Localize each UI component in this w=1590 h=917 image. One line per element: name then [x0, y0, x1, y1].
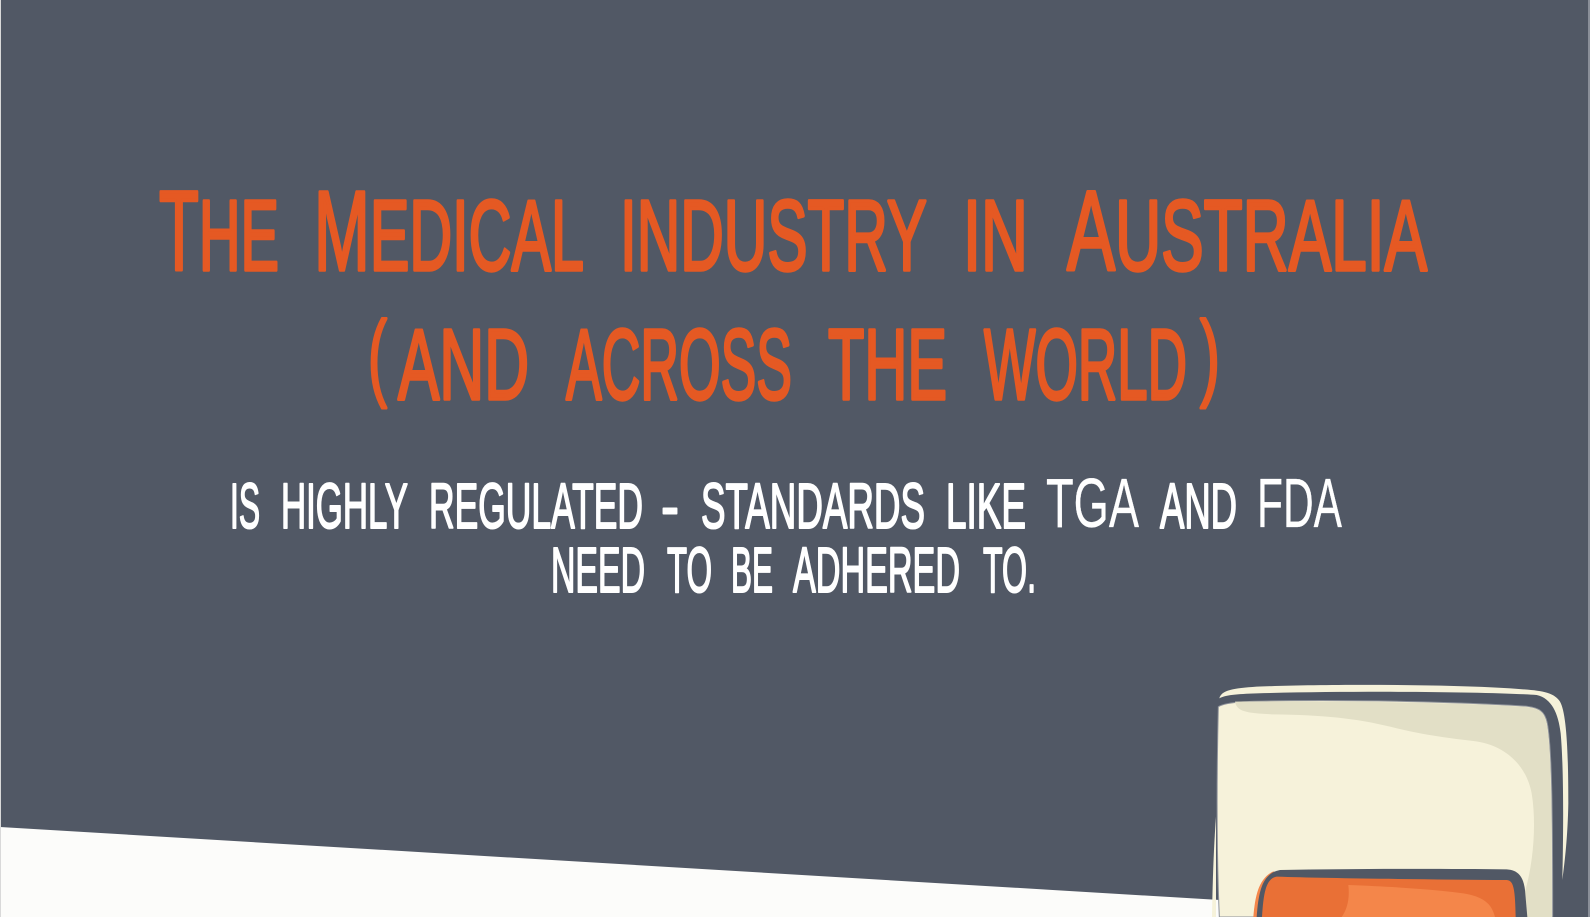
subtitle: NEED — [551, 534, 645, 606]
title: MEDICAL — [314, 168, 584, 294]
title: ) — [1200, 302, 1220, 409]
subtitle: LIKE — [946, 470, 1026, 542]
subtitle: TO — [667, 534, 712, 606]
subtitle: REGULATED — [429, 470, 643, 542]
subtitle: TGA — [1046, 464, 1139, 542]
subtitle: BE — [731, 534, 773, 606]
subtitle: - — [661, 470, 679, 542]
title: THE — [159, 168, 279, 294]
subtitle: STANDARDS — [701, 470, 925, 542]
subtitle: ADHERED — [793, 534, 960, 606]
title: IN — [963, 180, 1028, 292]
title: ( — [368, 302, 387, 409]
subtitle: TO. — [983, 534, 1036, 606]
subtitle — [230, 464, 1342, 606]
title: INDUSTRY — [620, 180, 927, 292]
title: WORLD — [984, 309, 1187, 421]
subtitle: AND — [1160, 470, 1237, 542]
subtitle: HIGHLY — [281, 470, 408, 542]
subtitle: FDA — [1257, 464, 1342, 542]
title: THE — [828, 309, 947, 421]
icon: device — [1212, 685, 1568, 917]
title: AUSTRALIA — [1067, 168, 1427, 294]
title — [159, 168, 1427, 421]
white ground wedge — [0, 827, 1220, 917]
title: AND — [398, 309, 529, 421]
title: ACROSS — [566, 309, 792, 421]
subtitle: IS — [230, 470, 260, 542]
